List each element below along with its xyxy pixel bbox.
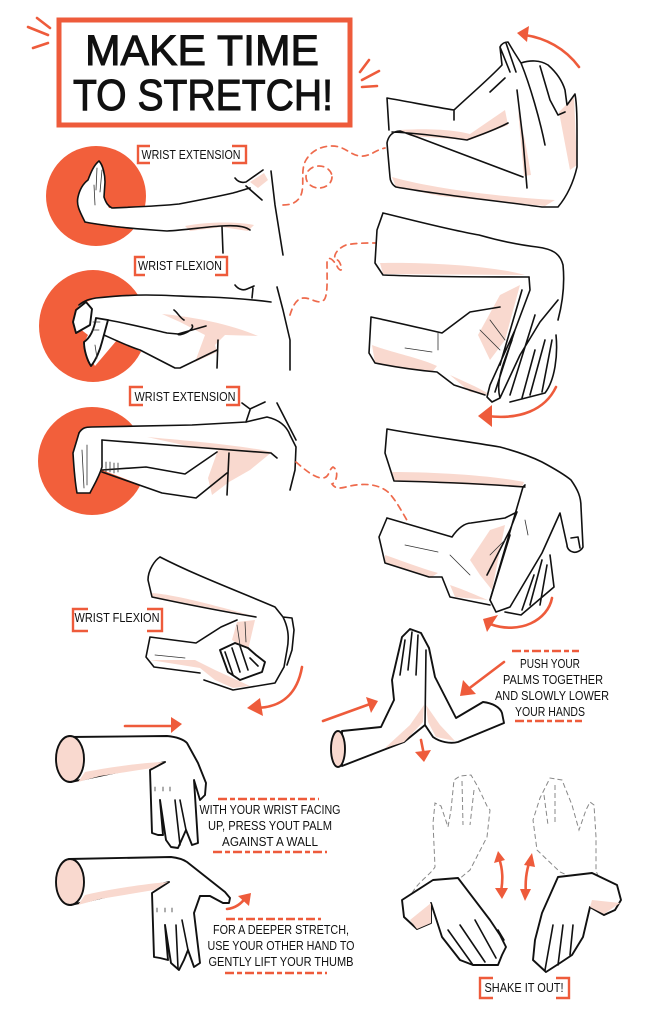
figure 3: wrist extension arm [73,402,296,498]
instruction: deeper stretch: FOR A DEEPER STRETCH, [213,923,349,937]
big arm 2: wrist flexion close-up [369,213,565,402]
instruction: wall press: AGAINST A WALL [222,835,318,849]
big arm 1: forearms pressed [387,42,577,207]
instruction: wall press: WITH YOUR WRIST FACING [200,803,340,817]
instruction: palms together: AND SLOWLY LOWER [495,689,609,703]
orange motion arrows [125,26,579,909]
hand pressing against wall [56,736,206,848]
figure 2: wrist flexion arm [73,285,290,370]
figure 1: wrist extension arm [77,161,283,255]
labels: wrist stretches [73,146,246,631]
title box [59,20,350,125]
labels: wrist stretches: WRIST FLEXION [74,611,160,625]
praying hands [331,629,504,767]
instruction: palms together: PALMS TOGETHER [503,673,603,687]
title box: TO STRETCH! [73,71,333,120]
dashed ghost hands [412,775,610,893]
instruction: deeper stretch [208,919,355,973]
instruction: palms together: YOUR HANDS [515,705,585,719]
big arm 3: wrist extension close-up [379,429,583,615]
instruction: wall press: UP, PRESS YOUT PALM [208,819,332,833]
red circles [38,146,147,515]
title box: MAKE TIME [85,27,319,75]
shake-out hand left [402,878,506,965]
title sparks [28,18,379,87]
labels: wrist stretches: WRIST EXTENSION [134,390,236,404]
dashed connector lines [283,146,408,522]
labels: wrist stretches: WRIST FLEXION [138,259,222,273]
instruction: deeper stretch: USE YOUR OTHER HAND TO [208,939,355,953]
label: shake it out: SHAKE IT OUT! [484,981,564,995]
instruction: palms together: PUSH YOUR [520,657,580,671]
wrist flexion hand [146,557,294,690]
label: shake it out [480,978,569,998]
instruction: wall press [200,799,340,852]
labels: wrist stretches: WRIST EXTENSION [142,148,240,162]
hand with lifted thumb [56,857,230,970]
shake-out hand right [533,873,621,972]
instruction: deeper stretch: GENTLY LIFT YOUR THUMB [208,955,354,969]
instruction: palms together [495,651,609,721]
